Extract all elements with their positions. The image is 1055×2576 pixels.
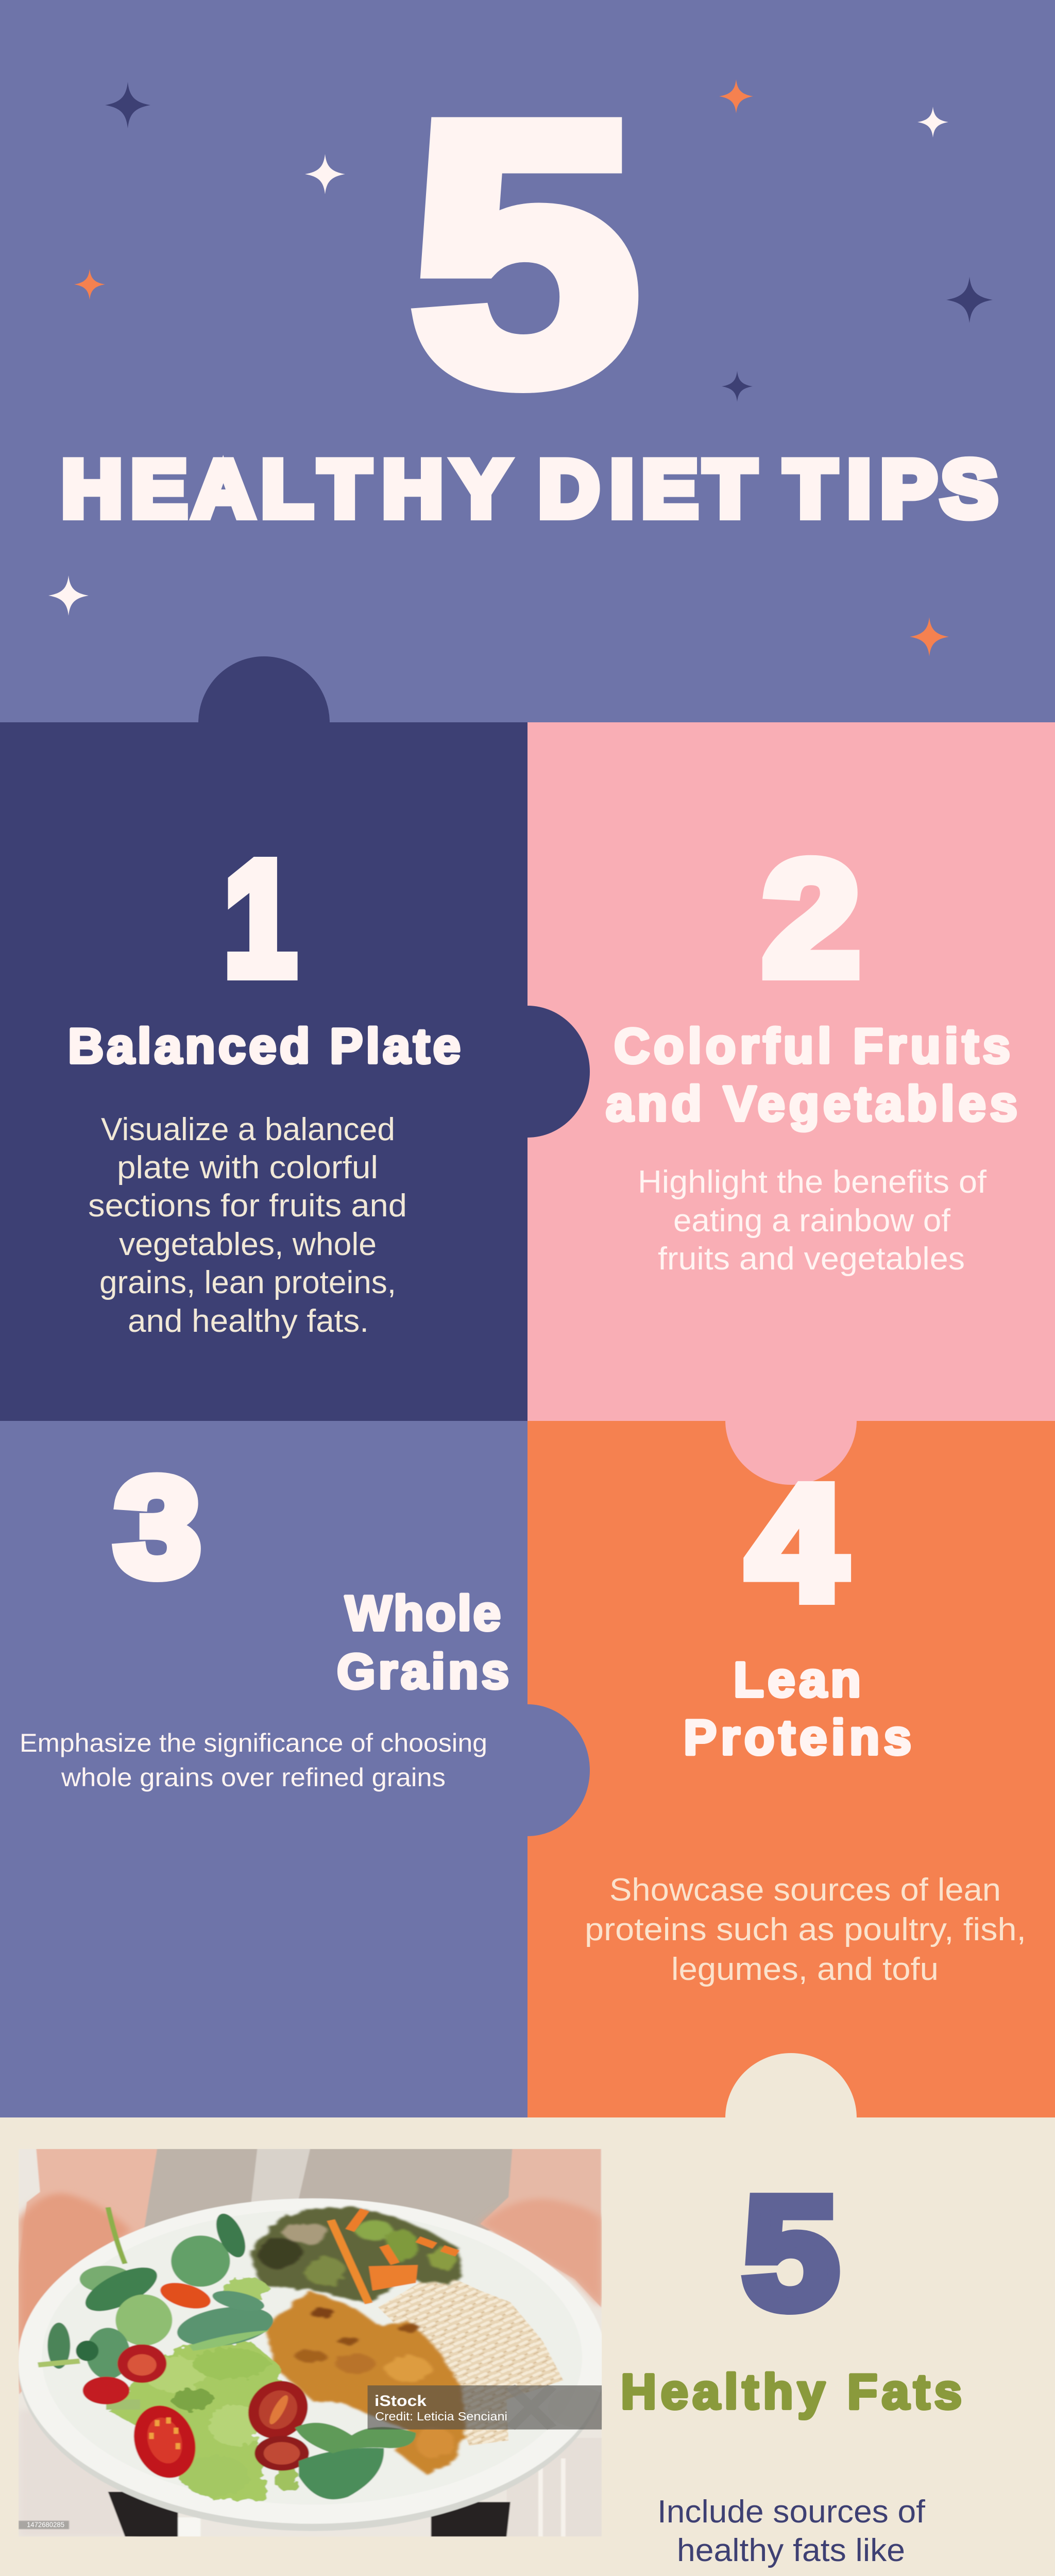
- body text: Include sources of: [657, 2494, 926, 2530]
- puzzle tab right: [528, 1006, 590, 1138]
- puzzle tab right: [528, 1704, 590, 1836]
- body text: [20, 1728, 487, 1792]
- body text: legumes, and tofu: [671, 1952, 939, 1987]
- heading: lean proteins: Lean: [734, 1652, 861, 1707]
- heading: colorful fruits and vegetables: Colorful Fruits: [614, 1019, 1010, 1074]
- body text: Showcase sources of lean: [609, 1872, 1001, 1908]
- heading: whole grains: Grains: [337, 1644, 509, 1699]
- puzzle tab down from pink panel: [725, 1420, 857, 1485]
- heading: colorful fruits and vegetables: and Vegetables: [606, 1076, 1017, 1131]
- body text: Visualize a balanced: [101, 1112, 395, 1147]
- body text: vegetables, whole: [119, 1227, 377, 1262]
- big number 5: 5: [410, 46, 640, 459]
- panel: header: [0, 0, 1055, 722]
- heading: lean proteins: Proteins: [684, 1710, 911, 1765]
- body text: eating a rainbow of: [673, 1203, 951, 1239]
- photo credit text: Credit: Leticia Senciani: [375, 2410, 507, 2423]
- body text: sections for fruits and: [88, 1188, 407, 1224]
- heading: balanced plate: Balanced Plate: [68, 1019, 461, 1074]
- number 2: 2: [763, 828, 860, 1009]
- heading: colorful fruits and vegetables: [606, 1019, 1017, 1131]
- body text: grains, lean proteins,: [99, 1265, 396, 1300]
- heading: healthy fats: Healthy Fats: [621, 2364, 962, 2419]
- puzzle tab up: [725, 2053, 857, 2118]
- body text: [628, 2494, 956, 2576]
- body text: whole grains over refined grains: [61, 1763, 446, 1792]
- number 4: 4: [747, 1452, 847, 1634]
- body text: fruits and vegetables: [658, 1241, 965, 1277]
- panel: tip 1 balanced plate: [0, 656, 590, 1421]
- number 3: 3: [115, 1450, 200, 1605]
- panel: tip 5 healthy fats: [19, 2053, 961, 2568]
- body text: Emphasize the significance of choosing: [20, 1728, 487, 1757]
- body text: [638, 1164, 987, 1277]
- title: HEALTHY DIET TIPS: [62, 444, 997, 533]
- body text: proteins such as poultry, fish,: [585, 1912, 1026, 1947]
- photo credit text: 1472680285: [27, 2520, 64, 2529]
- panel: tip 4 lean proteins: [528, 1420, 1055, 2117]
- body text: [585, 1872, 1026, 1987]
- body text: plate with colorful: [117, 1150, 378, 1185]
- body text: and healthy fats.: [128, 1303, 369, 1339]
- body text: [88, 1112, 407, 1339]
- body text: healthy fats like: [677, 2533, 905, 2568]
- heading: whole grains: [337, 1586, 509, 1699]
- stars: decorative sparkle group: [48, 79, 993, 656]
- photo: plate of salad, chicken and rice: [18, 2149, 608, 2537]
- number 5: 5: [743, 2164, 839, 2342]
- panel: tip 2 colorful fruits and vegetables: [528, 722, 1055, 1421]
- heading: whole grains: Whole: [345, 1586, 501, 1641]
- body text: Highlight the benefits of: [638, 1164, 987, 1200]
- puzzle tab up: [198, 656, 330, 723]
- heading: lean proteins: [684, 1652, 911, 1765]
- panel: tip 3 whole grains: [0, 1421, 590, 2117]
- photo credit text: [27, 2393, 507, 2529]
- number 1: 1: [224, 828, 296, 1009]
- photo credit text: iStock: [375, 2393, 427, 2410]
